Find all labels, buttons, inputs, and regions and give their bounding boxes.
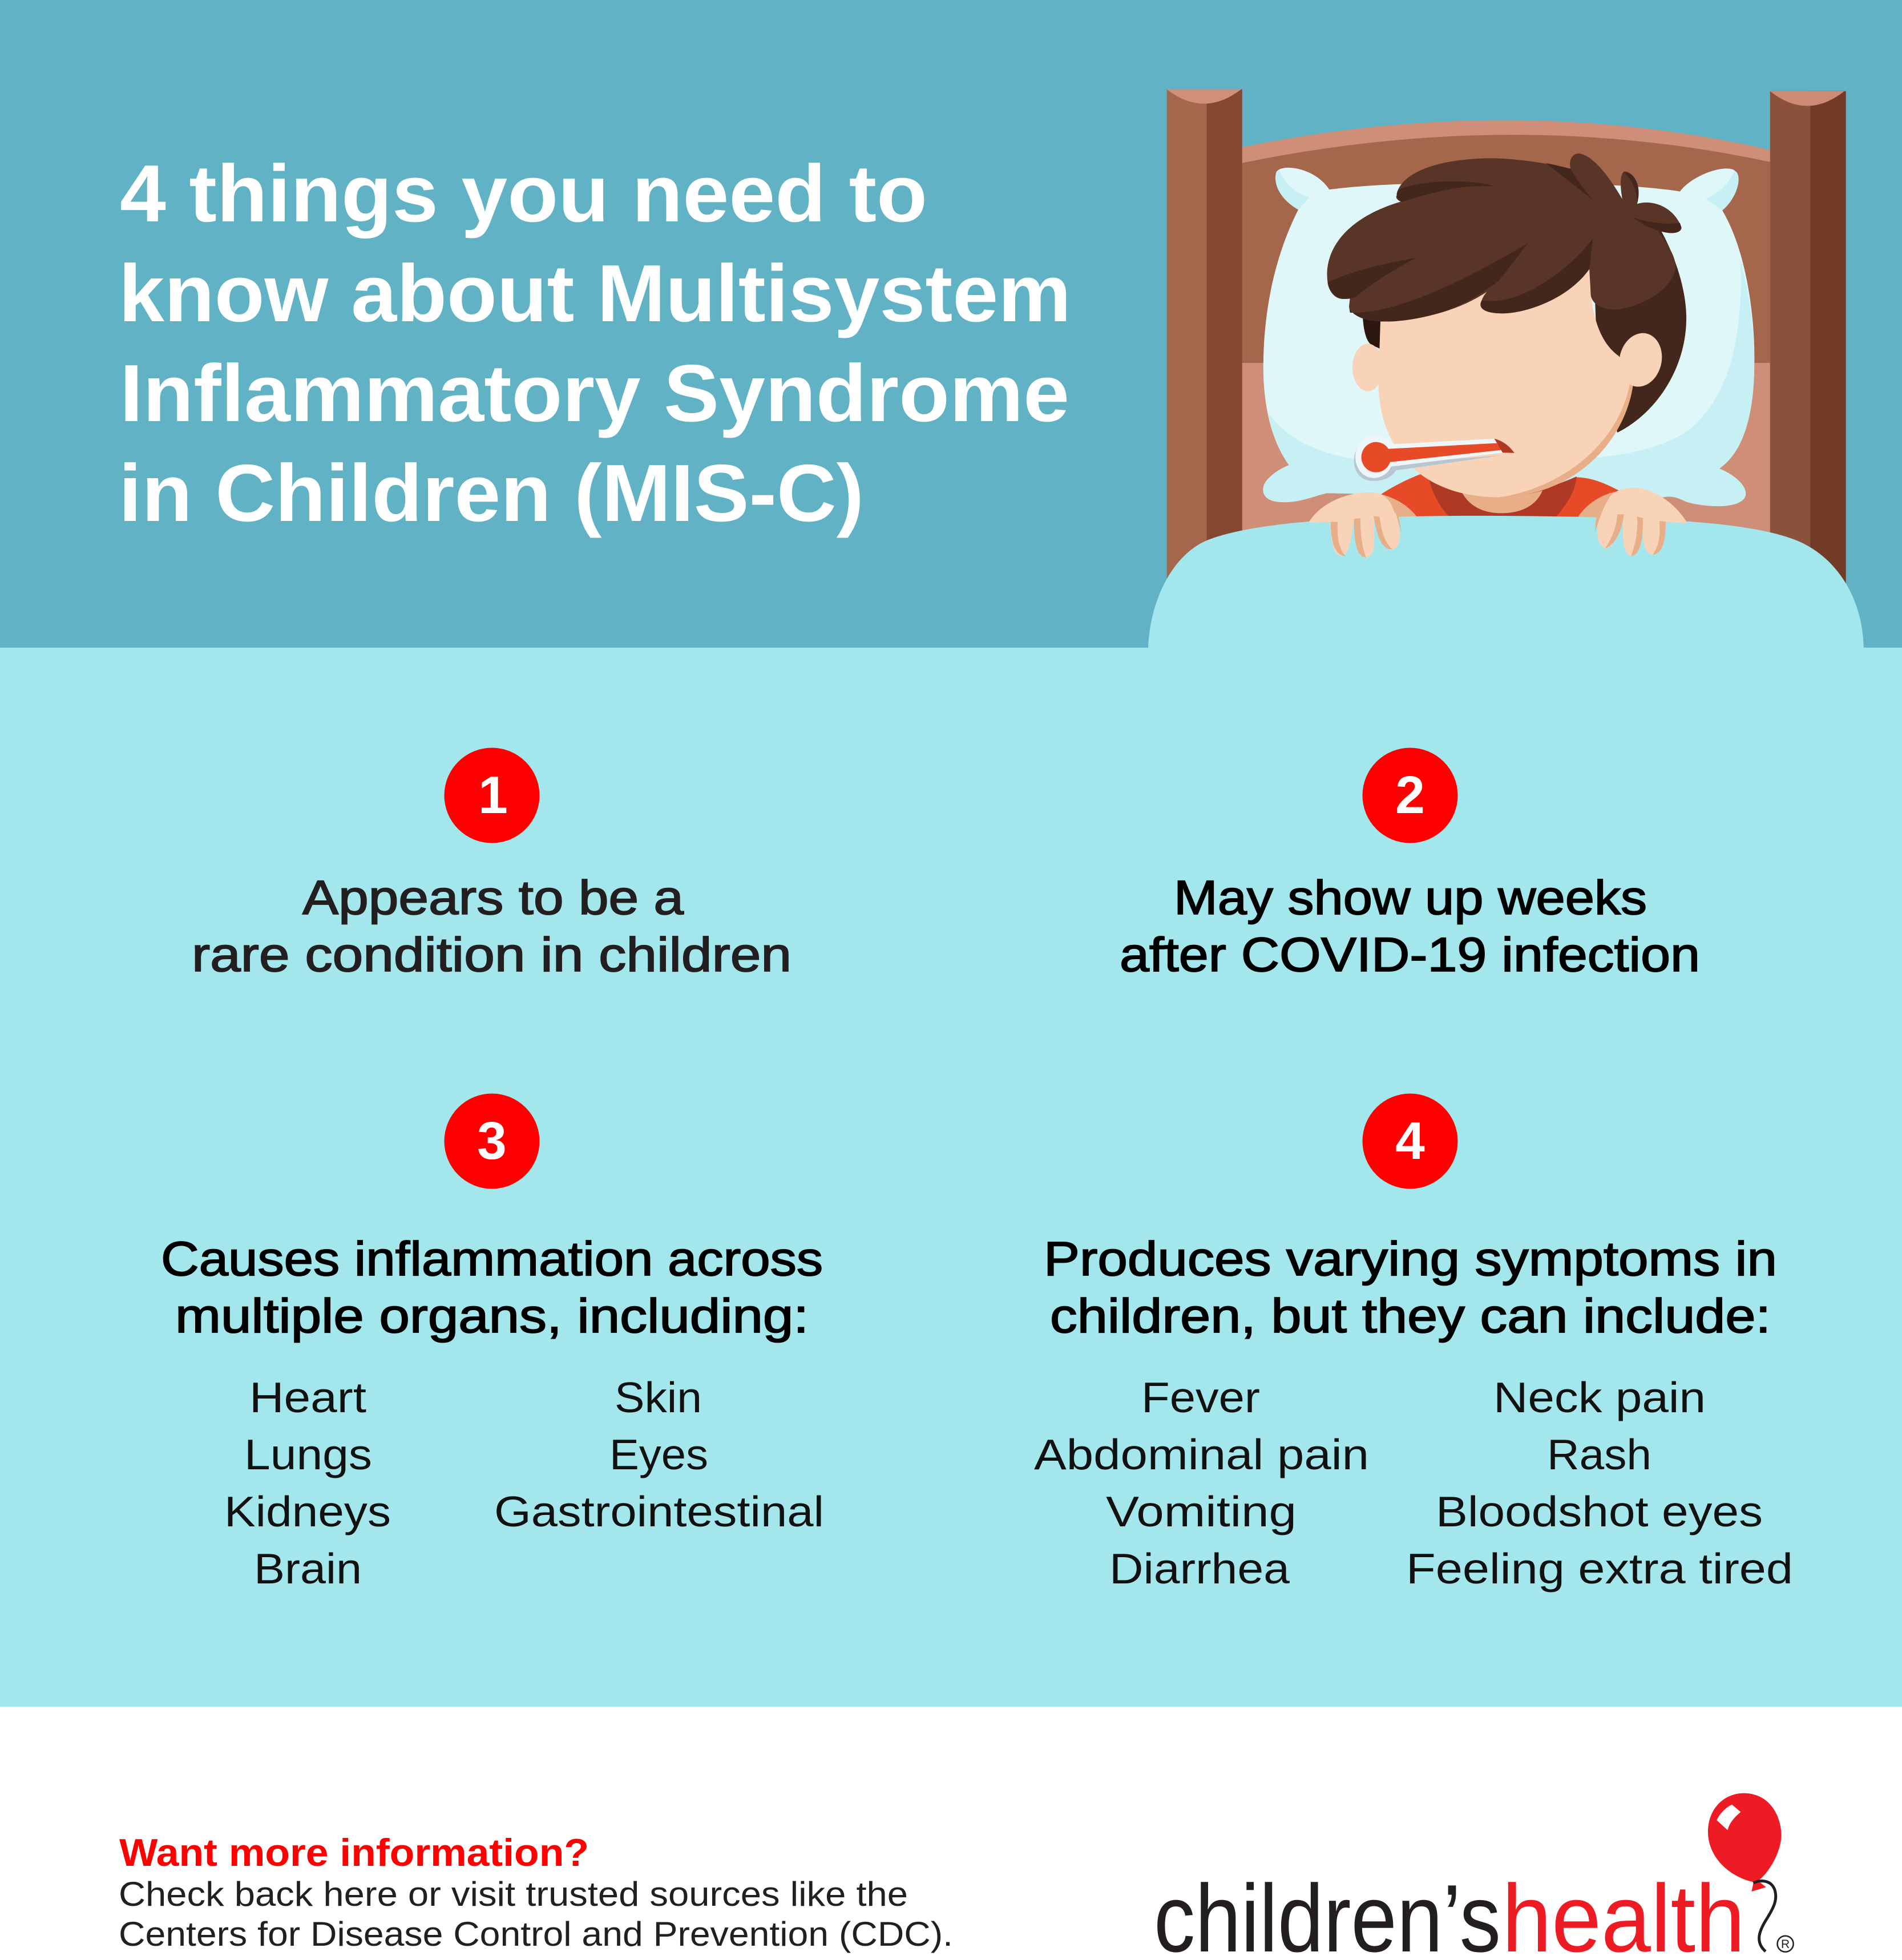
title: 4 things you need to [120, 148, 927, 239]
title: in Children (MIS-C) [119, 448, 864, 539]
number badge 3 [444, 1093, 540, 1189]
number badge 1 [444, 747, 540, 843]
symptom list left: Diarrhea [1109, 1545, 1290, 1593]
title: Inflammatory Syndrome [120, 348, 1069, 439]
left bed post [1167, 89, 1242, 581]
thermometer [1354, 435, 1515, 481]
left hand [1309, 492, 1401, 557]
illustration: sick boy in bed [1148, 89, 1864, 649]
footer call to action [119, 1831, 953, 1953]
boy [1327, 153, 1686, 523]
organ list left: Lungs [244, 1430, 372, 1478]
right bed post [1770, 91, 1846, 583]
panel: facts background [0, 648, 1902, 1707]
footer body text [119, 1875, 953, 1953]
organ list left: Brain [254, 1545, 362, 1593]
right hand [1595, 488, 1687, 556]
fact 1 text: Appears to be a [302, 871, 684, 924]
fact 1 text [192, 871, 792, 981]
number badge 2 [1363, 747, 1457, 843]
fact 3 heading: Causes inflammation across [161, 1232, 823, 1286]
icon: red balloon [1708, 1793, 1781, 1951]
fact 2 [1120, 747, 1700, 981]
organ list left: Kidneys [224, 1488, 391, 1535]
fact 4 [1034, 1093, 1793, 1593]
footer body text: Centers for Disease Control and Prevention (CDC). [119, 1915, 953, 1953]
registered mark [1778, 1936, 1794, 1952]
number badge 4 [1363, 1093, 1457, 1189]
fact 3 [161, 1093, 824, 1593]
fact 3 heading [161, 1232, 823, 1343]
number badge 1: 1 [478, 765, 508, 825]
symptom list left [1034, 1373, 1369, 1593]
title [119, 148, 1071, 539]
fact 4 heading: children, but they can include: [1050, 1289, 1771, 1343]
symptom list right: Bloodshot eyes [1436, 1488, 1763, 1535]
footer body text: Check back here or visit trusted sources like the [119, 1875, 908, 1913]
organ list right: Eyes [609, 1430, 708, 1478]
number badge 4: 4 [1395, 1111, 1425, 1170]
symptom list left: Vomiting [1106, 1488, 1297, 1535]
symptom list right: Rash [1547, 1430, 1651, 1478]
fact 1 [192, 747, 792, 981]
blanket [1148, 516, 1864, 649]
registered mark: R [1781, 1938, 1790, 1951]
number badge 2: 2 [1395, 765, 1425, 825]
fact 2 text [1120, 871, 1700, 981]
symptom list left: Fever [1141, 1373, 1260, 1421]
organ list right: Gastrointestinal [494, 1488, 824, 1535]
symptom list right: Feeling extra tired [1406, 1545, 1793, 1593]
panel: header [0, 0, 1902, 648]
fact 3 heading: multiple organs, including: [175, 1289, 809, 1343]
logo wordmark [1154, 1865, 1745, 1960]
fact 4 heading [1044, 1232, 1777, 1343]
organ list left [224, 1373, 391, 1593]
symptom list left: Abdominal pain [1034, 1430, 1369, 1478]
organ list right [494, 1373, 824, 1535]
organ list right: Skin [615, 1373, 702, 1421]
title: know about Multisystem [119, 248, 1071, 339]
fact 2 text: after COVID-19 infection [1120, 928, 1700, 981]
headboard [1242, 120, 1770, 560]
fact 1 text: rare condition in children [192, 928, 792, 981]
fact 4 heading: Produces varying symptoms in [1044, 1232, 1777, 1286]
symptom list right: Neck pain [1493, 1373, 1706, 1421]
symptom list right [1406, 1373, 1793, 1593]
footer heading: Want more information? [119, 1831, 589, 1874]
fact 2 text: May show up weeks [1174, 871, 1647, 924]
organ list left: Heart [249, 1373, 366, 1421]
number badge 3: 3 [477, 1111, 507, 1170]
pillow [1263, 168, 1754, 506]
logo: children's health [1154, 1793, 1794, 1960]
